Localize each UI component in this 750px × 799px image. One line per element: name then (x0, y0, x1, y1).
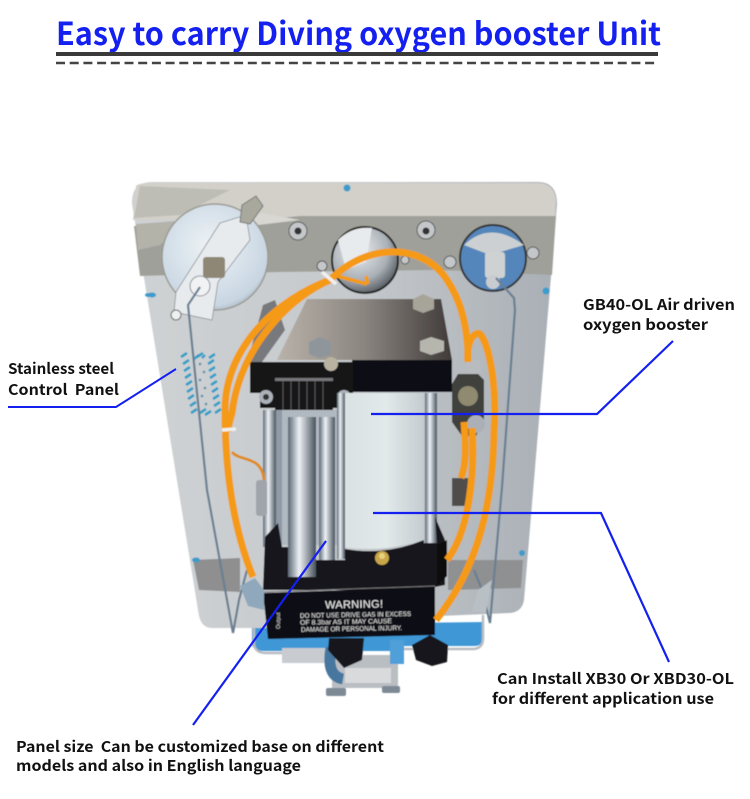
callout: panel size: Panel size Can be customized base on different (16, 736, 385, 757)
callout: panel size: models and also in English language (16, 755, 301, 776)
panel: stainless steel plate (132, 182, 557, 628)
callout: air driven booster: oxygen booster (583, 314, 709, 335)
callout: air driven booster: GB40-OL Air driven (583, 294, 735, 315)
rods (263, 410, 276, 547)
cylinder (340, 393, 424, 549)
lower weld zone (193, 558, 240, 592)
callout: panel size (16, 541, 385, 776)
callout: air driven booster (371, 294, 735, 414)
holes (145, 184, 550, 562)
tray behind panel (252, 622, 484, 651)
warning label plate: Output (276, 612, 282, 629)
product photo: oxygen booster on panel (132, 182, 557, 696)
callout: control panel (8, 358, 176, 407)
wing bolts and fittings (289, 221, 539, 271)
bottom block (263, 517, 445, 590)
large gauge (162, 204, 268, 310)
right valve (452, 374, 484, 436)
bottom fittings (282, 648, 326, 663)
callout: control panel: Stainless steel (8, 358, 114, 379)
bolts (309, 337, 331, 358)
warning label plate: OF 8.3bar AS IT MAY CAUSE (300, 618, 393, 627)
warning label plate (263, 586, 435, 639)
thin guard wires (188, 287, 247, 633)
warning label plate: WARNING! (325, 598, 383, 612)
two small gauges (332, 227, 398, 293)
warning label plate: DAMAGE OR PERSONAL INJURY. (301, 625, 402, 634)
callout: install options: Can Install XB30 Or XBD30-OL (497, 668, 734, 689)
title: Easy to carry Diving oxygen booster Unit (56, 9, 661, 55)
top block (277, 299, 452, 360)
warning label plate: DO NOT USE DRIVE GAS IN EXCESS (300, 611, 412, 620)
upper weld zone (133, 183, 556, 220)
callout: install options: for different application use (492, 688, 714, 709)
orange tubes (225, 252, 495, 620)
callout: install options (373, 513, 734, 709)
vent slots (181, 353, 221, 415)
callout: control panel: Control Panel (8, 379, 119, 400)
